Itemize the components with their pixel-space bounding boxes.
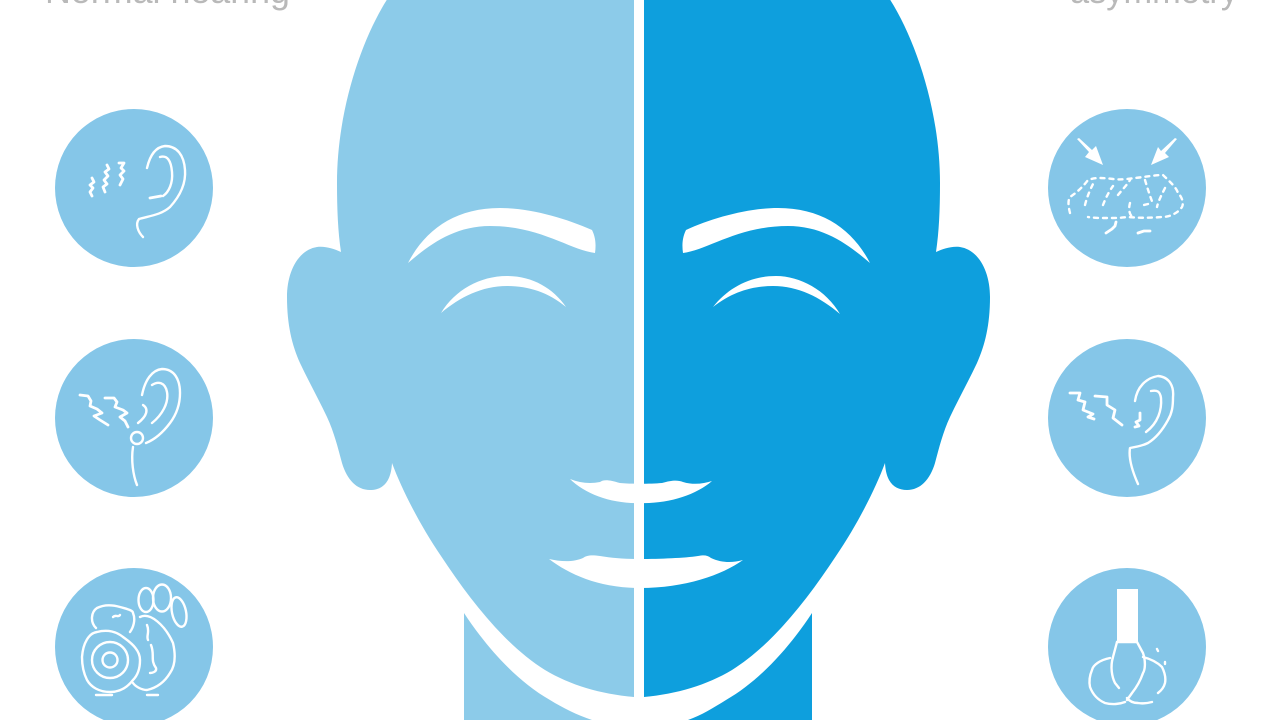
icon: ear with blocked canal <box>55 339 213 497</box>
icon: inner ear probe <box>1048 568 1206 720</box>
icon: cochlea and inner ear <box>55 568 213 720</box>
mouth <box>549 555 743 588</box>
icon: ear with sound waves <box>1048 339 1206 497</box>
icon: brain with incoming arrows <box>1048 109 1206 267</box>
left half of face <box>287 0 634 697</box>
left eyebrow <box>408 208 596 263</box>
left arrow <box>1077 138 1103 165</box>
icon: normal ear with faint sound <box>55 109 213 267</box>
left neck <box>464 613 592 720</box>
left eye <box>441 276 566 313</box>
right half of face <box>644 0 990 697</box>
right arrow <box>1151 138 1177 165</box>
right neck <box>688 613 812 720</box>
probe bar <box>1117 589 1138 642</box>
face illustration <box>287 0 990 720</box>
right eyebrow <box>682 208 870 263</box>
right eye <box>713 276 840 314</box>
center dividing line <box>634 0 644 697</box>
nose <box>570 479 712 503</box>
